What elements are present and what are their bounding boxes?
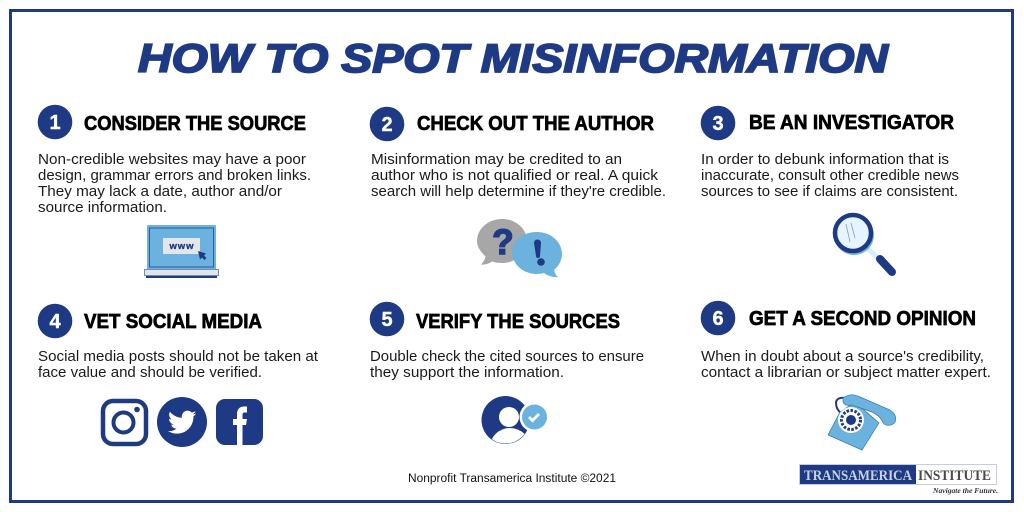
text block 6: When in doubt about a source's credibility,	[701, 349, 984, 365]
icon: rotary telephone	[828, 395, 896, 450]
text block 5: they support the information.	[370, 365, 564, 381]
logo: Transamerica Institute: INSTITUTE	[918, 468, 991, 484]
number badge 3	[701, 106, 735, 140]
logo: Transamerica Institute	[800, 464, 998, 495]
heading 4: VET SOCIAL MEDIA	[84, 311, 262, 333]
footer credit: Nonprofit Transamerica Institute ©2021	[408, 473, 616, 485]
logo: Transamerica Institute: Navigate the Future.	[932, 486, 998, 495]
panel: get a second opinion	[701, 301, 991, 450]
heading 5: VERIFY THE SOURCES	[416, 311, 620, 333]
number badge 6	[701, 301, 735, 335]
text block 1: They may lack a date, author and/or	[38, 184, 282, 200]
icon: laptop	[144, 225, 218, 278]
number badge 5	[370, 302, 404, 336]
number badge 3: 3	[712, 113, 724, 135]
text block 6	[701, 349, 991, 381]
text block 5	[370, 349, 644, 381]
icon: facebook	[216, 399, 263, 445]
number badge 1: 1	[49, 112, 61, 134]
text block 5: Double check the cited sources to ensure	[370, 349, 644, 365]
icon: laptop: www	[168, 241, 194, 252]
heading 2: CHECK OUT THE AUTHOR	[417, 113, 655, 135]
number badge 5: 5	[381, 309, 393, 331]
text block 1: design, grammar errors and broken links.	[38, 168, 311, 184]
icon: verified user	[482, 396, 547, 444]
icon: instagram	[103, 401, 146, 444]
heading 3: BE AN INVESTIGATOR	[749, 112, 955, 134]
text block 3: inaccurate, consult other credible news	[701, 168, 959, 184]
text block 4: face value and should be verified.	[38, 365, 262, 381]
logo: Transamerica Institute: TRANSAMERICA	[804, 468, 912, 484]
panel: check out the author	[370, 107, 666, 277]
text block 1: Non-credible websites may have a poor	[38, 152, 306, 168]
number badge 4: 4	[49, 311, 61, 333]
text block 4	[38, 349, 318, 381]
heading 1: CONSIDER THE SOURCE	[84, 113, 306, 135]
number badge 6: 6	[712, 308, 724, 330]
number badge 2: 2	[381, 114, 393, 136]
text block 6: contact a librarian or subject matter expert.	[701, 365, 991, 381]
text block 2: search will help determine if they're credible.	[371, 184, 666, 200]
text block 2: Misinformation may be credited to an	[371, 152, 622, 168]
text block 2: author who is not qualified or real. A quick	[371, 168, 659, 184]
icon: speech bubbles	[477, 219, 562, 277]
text block 2	[371, 152, 666, 200]
text block 3	[701, 152, 959, 200]
number badge 1	[38, 105, 72, 139]
heading 6: GET A SECOND OPINION	[749, 308, 976, 330]
title: HOW TO SPOT MISINFORMATION	[138, 37, 889, 81]
text block 1	[38, 152, 311, 216]
panel: consider the source	[38, 105, 311, 278]
icon: speech bubbles: ?	[492, 223, 514, 262]
panel: verify the sources	[370, 302, 644, 444]
icon: magnifying glass	[834, 215, 892, 272]
text block 4: Social media posts should not be taken at	[38, 349, 318, 365]
panel: vet social media	[38, 304, 318, 447]
panel: be an investigator	[701, 106, 959, 272]
icon: twitter	[157, 397, 207, 447]
number badge 2	[370, 107, 404, 141]
text block 3: sources to see if claims are consistent.	[701, 184, 958, 200]
text block 3: In order to debunk information that is	[701, 152, 949, 168]
number badge 4	[38, 304, 72, 338]
text block 1: source information.	[38, 200, 167, 216]
